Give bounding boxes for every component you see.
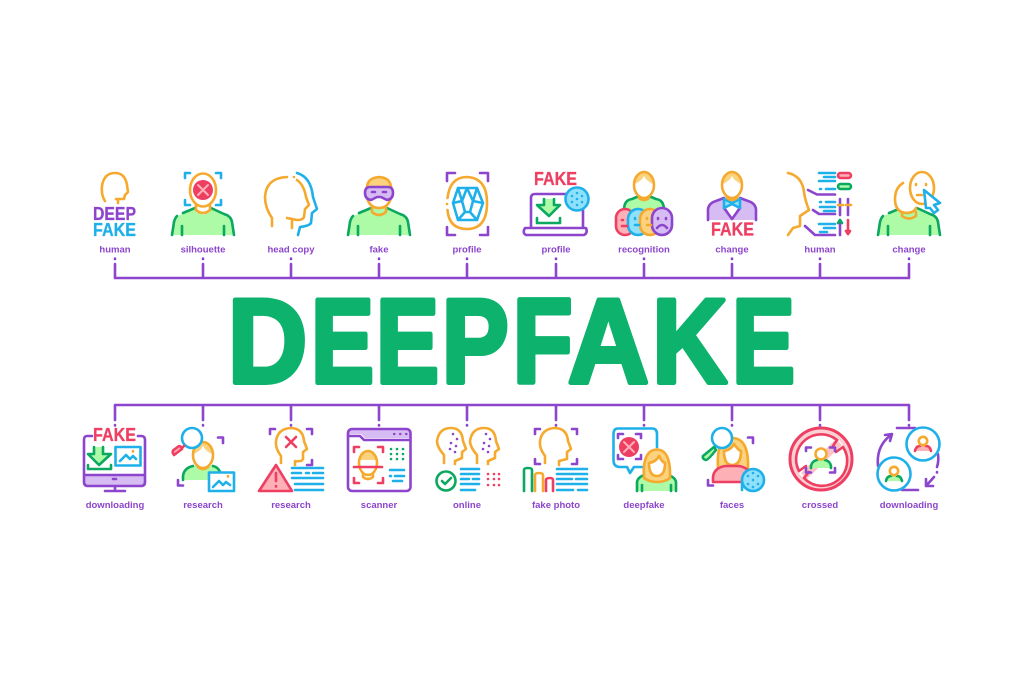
title: K xyxy=(652,274,727,408)
labels: top row: fake xyxy=(369,244,389,256)
labels: top row: profile xyxy=(541,244,571,256)
icon: fake goggles xyxy=(348,177,410,235)
icon: human deep fake xyxy=(93,173,136,240)
title xyxy=(228,274,795,408)
icon: downloading swap xyxy=(878,428,940,490)
labels: bottom row: online xyxy=(453,500,481,511)
icon: deepfake bubble xyxy=(614,428,676,491)
icon: research warning xyxy=(259,428,323,491)
labels: bottom row: fake photo xyxy=(532,500,580,511)
title: E xyxy=(732,274,795,408)
labels: bottom row: deepfake xyxy=(623,500,665,511)
icon: silhouette xyxy=(172,173,234,235)
icon: human deep fake: DEEP xyxy=(93,204,136,224)
labels: bottom row: downloading xyxy=(86,500,144,511)
title: A xyxy=(568,274,649,408)
labels: top row xyxy=(99,244,926,256)
icon: human settings xyxy=(788,173,851,235)
icon: laptop download xyxy=(524,169,588,235)
labels: top row: silhouette xyxy=(181,244,225,256)
icon: fake photo xyxy=(524,428,587,491)
bottom connector bracket xyxy=(115,405,909,426)
icon: laptop download: FAKE xyxy=(534,169,577,189)
icon: suit with fake: FAKE xyxy=(711,220,754,240)
icon: online faces xyxy=(436,428,500,490)
icon: mask profile xyxy=(447,173,488,235)
labels: bottom row: crossed xyxy=(802,500,838,511)
labels: top row: change xyxy=(715,244,749,256)
labels: top row: human xyxy=(804,244,836,256)
labels: bottom row: research xyxy=(271,500,311,511)
labels: bottom row: scanner xyxy=(361,500,398,511)
title: E xyxy=(376,274,439,408)
title: P xyxy=(442,274,509,408)
title: E xyxy=(311,274,374,408)
labels: bottom row xyxy=(86,500,938,511)
icon: suit with fake xyxy=(708,172,756,240)
icon: scanner window xyxy=(348,429,410,491)
labels: top row: recognition xyxy=(618,244,670,256)
labels: bottom row: downloading xyxy=(880,500,938,511)
icon: head copy xyxy=(265,173,317,235)
icon: two-face cursor xyxy=(878,172,940,235)
title: D xyxy=(228,274,307,408)
labels: top row: profile xyxy=(452,244,482,256)
icon: monitor download xyxy=(84,425,145,491)
icon: human deep fake: FAKE xyxy=(93,220,136,240)
icon: recognition masks xyxy=(616,172,672,235)
icon: crossed person xyxy=(790,428,852,490)
top connector bracket xyxy=(115,258,909,278)
labels: top row: head copy xyxy=(268,244,315,256)
icon: faces xyxy=(703,428,764,491)
icon: research person xyxy=(173,428,234,491)
title: F xyxy=(513,274,572,408)
icon: monitor download: FAKE xyxy=(93,425,136,445)
labels: bottom row: faces xyxy=(720,500,744,511)
labels: bottom row: research xyxy=(183,500,223,511)
labels: top row: change xyxy=(892,244,926,256)
labels: top row: human xyxy=(99,244,131,256)
